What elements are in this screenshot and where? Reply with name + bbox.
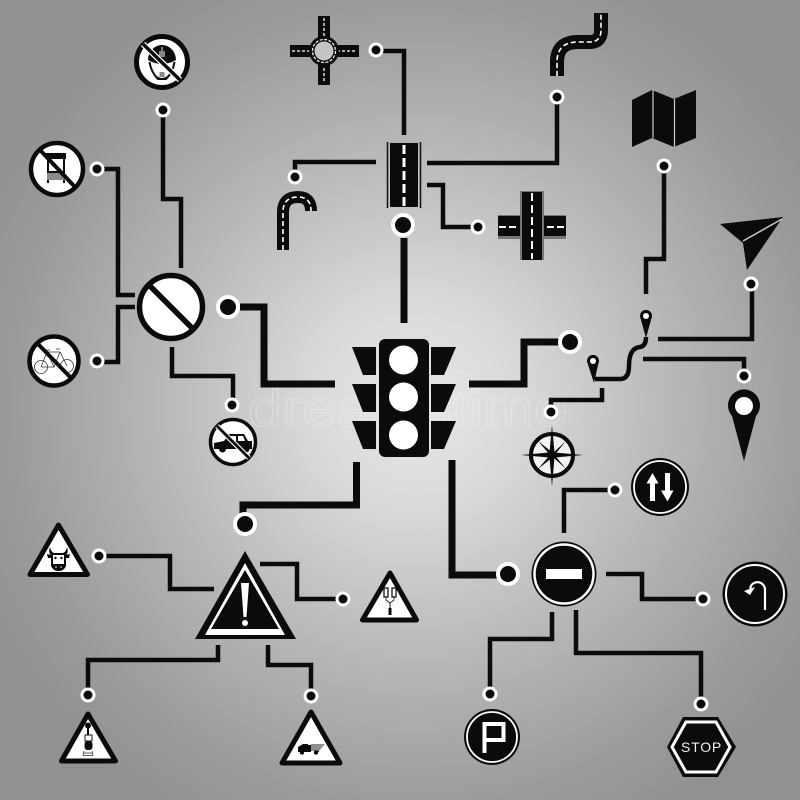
sign: train warning bbox=[62, 714, 116, 761]
connector: warning to train sign bbox=[82, 645, 218, 701]
connector: route to map pin bbox=[643, 359, 750, 382]
connector: prohibition to balloon sign bbox=[157, 104, 181, 268]
watermark: dreamstime bbox=[248, 380, 568, 438]
sign: no car bbox=[210, 420, 256, 464]
connector: warning to cow sign bbox=[93, 550, 214, 589]
traffic light wings bbox=[352, 347, 456, 449]
connector: no entry to U-turn sign bbox=[606, 574, 709, 605]
icon: winding route with two pins bbox=[587, 310, 652, 383]
connector: no entry to two-way sign bbox=[564, 484, 621, 533]
sign: road works warning bbox=[362, 573, 416, 620]
connector: no entry to parking sign bbox=[484, 612, 552, 700]
sign: two-way traffic bbox=[631, 458, 689, 516]
connector: warning to road works sign bbox=[260, 564, 349, 605]
mandatory hub sign: no entry bbox=[532, 542, 596, 606]
sign: truck warning bbox=[282, 712, 340, 763]
icon: crossroads bbox=[498, 191, 566, 260]
icon: paper plane bbox=[720, 217, 783, 270]
traffic light body bbox=[379, 339, 429, 457]
connector: road to S curve bbox=[427, 91, 563, 163]
connector: warning to truck sign bbox=[268, 645, 317, 702]
connector: prohibition to car sign bbox=[172, 347, 238, 411]
traffic light hub bbox=[352, 339, 456, 457]
connector: no entry to stop sign bbox=[576, 610, 707, 710]
connector: traffic light to mandatory sign bbox=[452, 460, 518, 584]
traffic light lamps bbox=[389, 346, 418, 450]
connector: route to map bbox=[646, 160, 670, 294]
warning hub sign bbox=[195, 551, 296, 639]
sign: cattle warning bbox=[30, 525, 88, 574]
connector: traffic light to prohibition sign bbox=[218, 297, 335, 384]
connector: route to plane bbox=[658, 278, 757, 339]
connector: prohibition to truck sign bbox=[91, 163, 135, 295]
icon: compass bbox=[521, 425, 583, 486]
sign: no truck bbox=[31, 143, 83, 195]
sign: no bicycle bbox=[30, 336, 78, 386]
sign: no balloon bbox=[136, 36, 188, 88]
exclamation mark bbox=[241, 583, 249, 626]
icon: folded map bbox=[632, 90, 696, 147]
stop label: STOP bbox=[681, 739, 722, 755]
prohibition hub sign bbox=[140, 276, 202, 338]
connector: road to crossroads bbox=[427, 185, 484, 233]
connector: prohibition to bicycle sign bbox=[91, 307, 135, 367]
icon: bend road bbox=[283, 197, 311, 250]
sign: parking bbox=[464, 709, 520, 765]
connector: traffic light to warning sign bbox=[235, 462, 356, 534]
sign: stop bbox=[667, 717, 736, 777]
icon: map pin bbox=[728, 389, 760, 461]
icon: roundabout bbox=[290, 16, 359, 85]
icon: S curve road bbox=[557, 13, 601, 76]
connector: traffic light to road bbox=[393, 215, 413, 323]
connector: road to bend bbox=[289, 162, 376, 183]
connector: route to compass bbox=[545, 388, 602, 418]
sign: U-turn bbox=[722, 562, 788, 626]
connector: traffic light to navigation bbox=[469, 332, 580, 384]
connector: road to roundabout bbox=[370, 44, 404, 135]
road hub icon bbox=[388, 142, 420, 208]
